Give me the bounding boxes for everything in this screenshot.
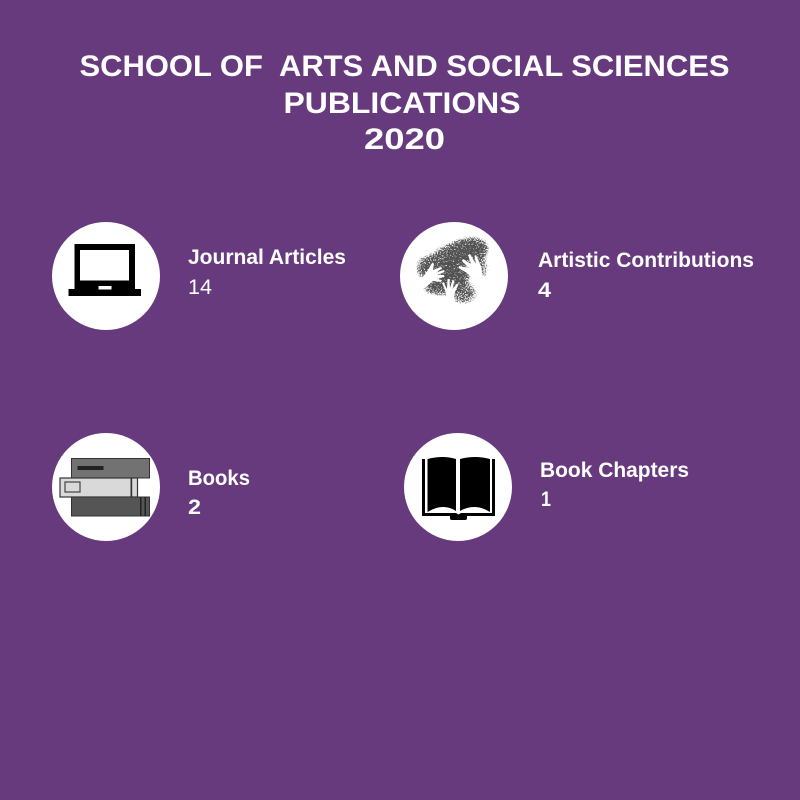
value: 4: 4 [538, 278, 551, 302]
label: artistic contributions: Artistic Contributions [538, 249, 754, 272]
label: books: Books [188, 467, 250, 490]
panel: books [52, 433, 250, 541]
hand: right [458, 254, 484, 283]
panel: book chapters [404, 433, 689, 541]
label: journal articles: Journal Articles [188, 246, 346, 269]
icon: open book [404, 433, 512, 541]
title: 2020 [364, 123, 445, 156]
icon: stack of books [52, 433, 160, 541]
book: bottom [72, 497, 150, 516]
book: middle [60, 478, 138, 497]
value: 14: 14 [188, 275, 212, 299]
book: top [72, 458, 150, 478]
icon: laptop [52, 222, 160, 330]
title: PUBLICATIONS [284, 87, 520, 120]
panel: journal articles [52, 222, 346, 330]
hand: left [418, 263, 444, 290]
title [80, 50, 729, 156]
icon: hands in splatter [400, 222, 508, 330]
hand: bottom [442, 279, 458, 307]
panel: artistic contributions [400, 222, 754, 330]
value: 2: 2 [188, 495, 201, 519]
value: 1: 1 [541, 487, 551, 511]
title: SCHOOL OF ARTS AND SOCIAL SCIENCES [80, 50, 729, 83]
label: book chapters: Book Chapters [540, 459, 689, 482]
